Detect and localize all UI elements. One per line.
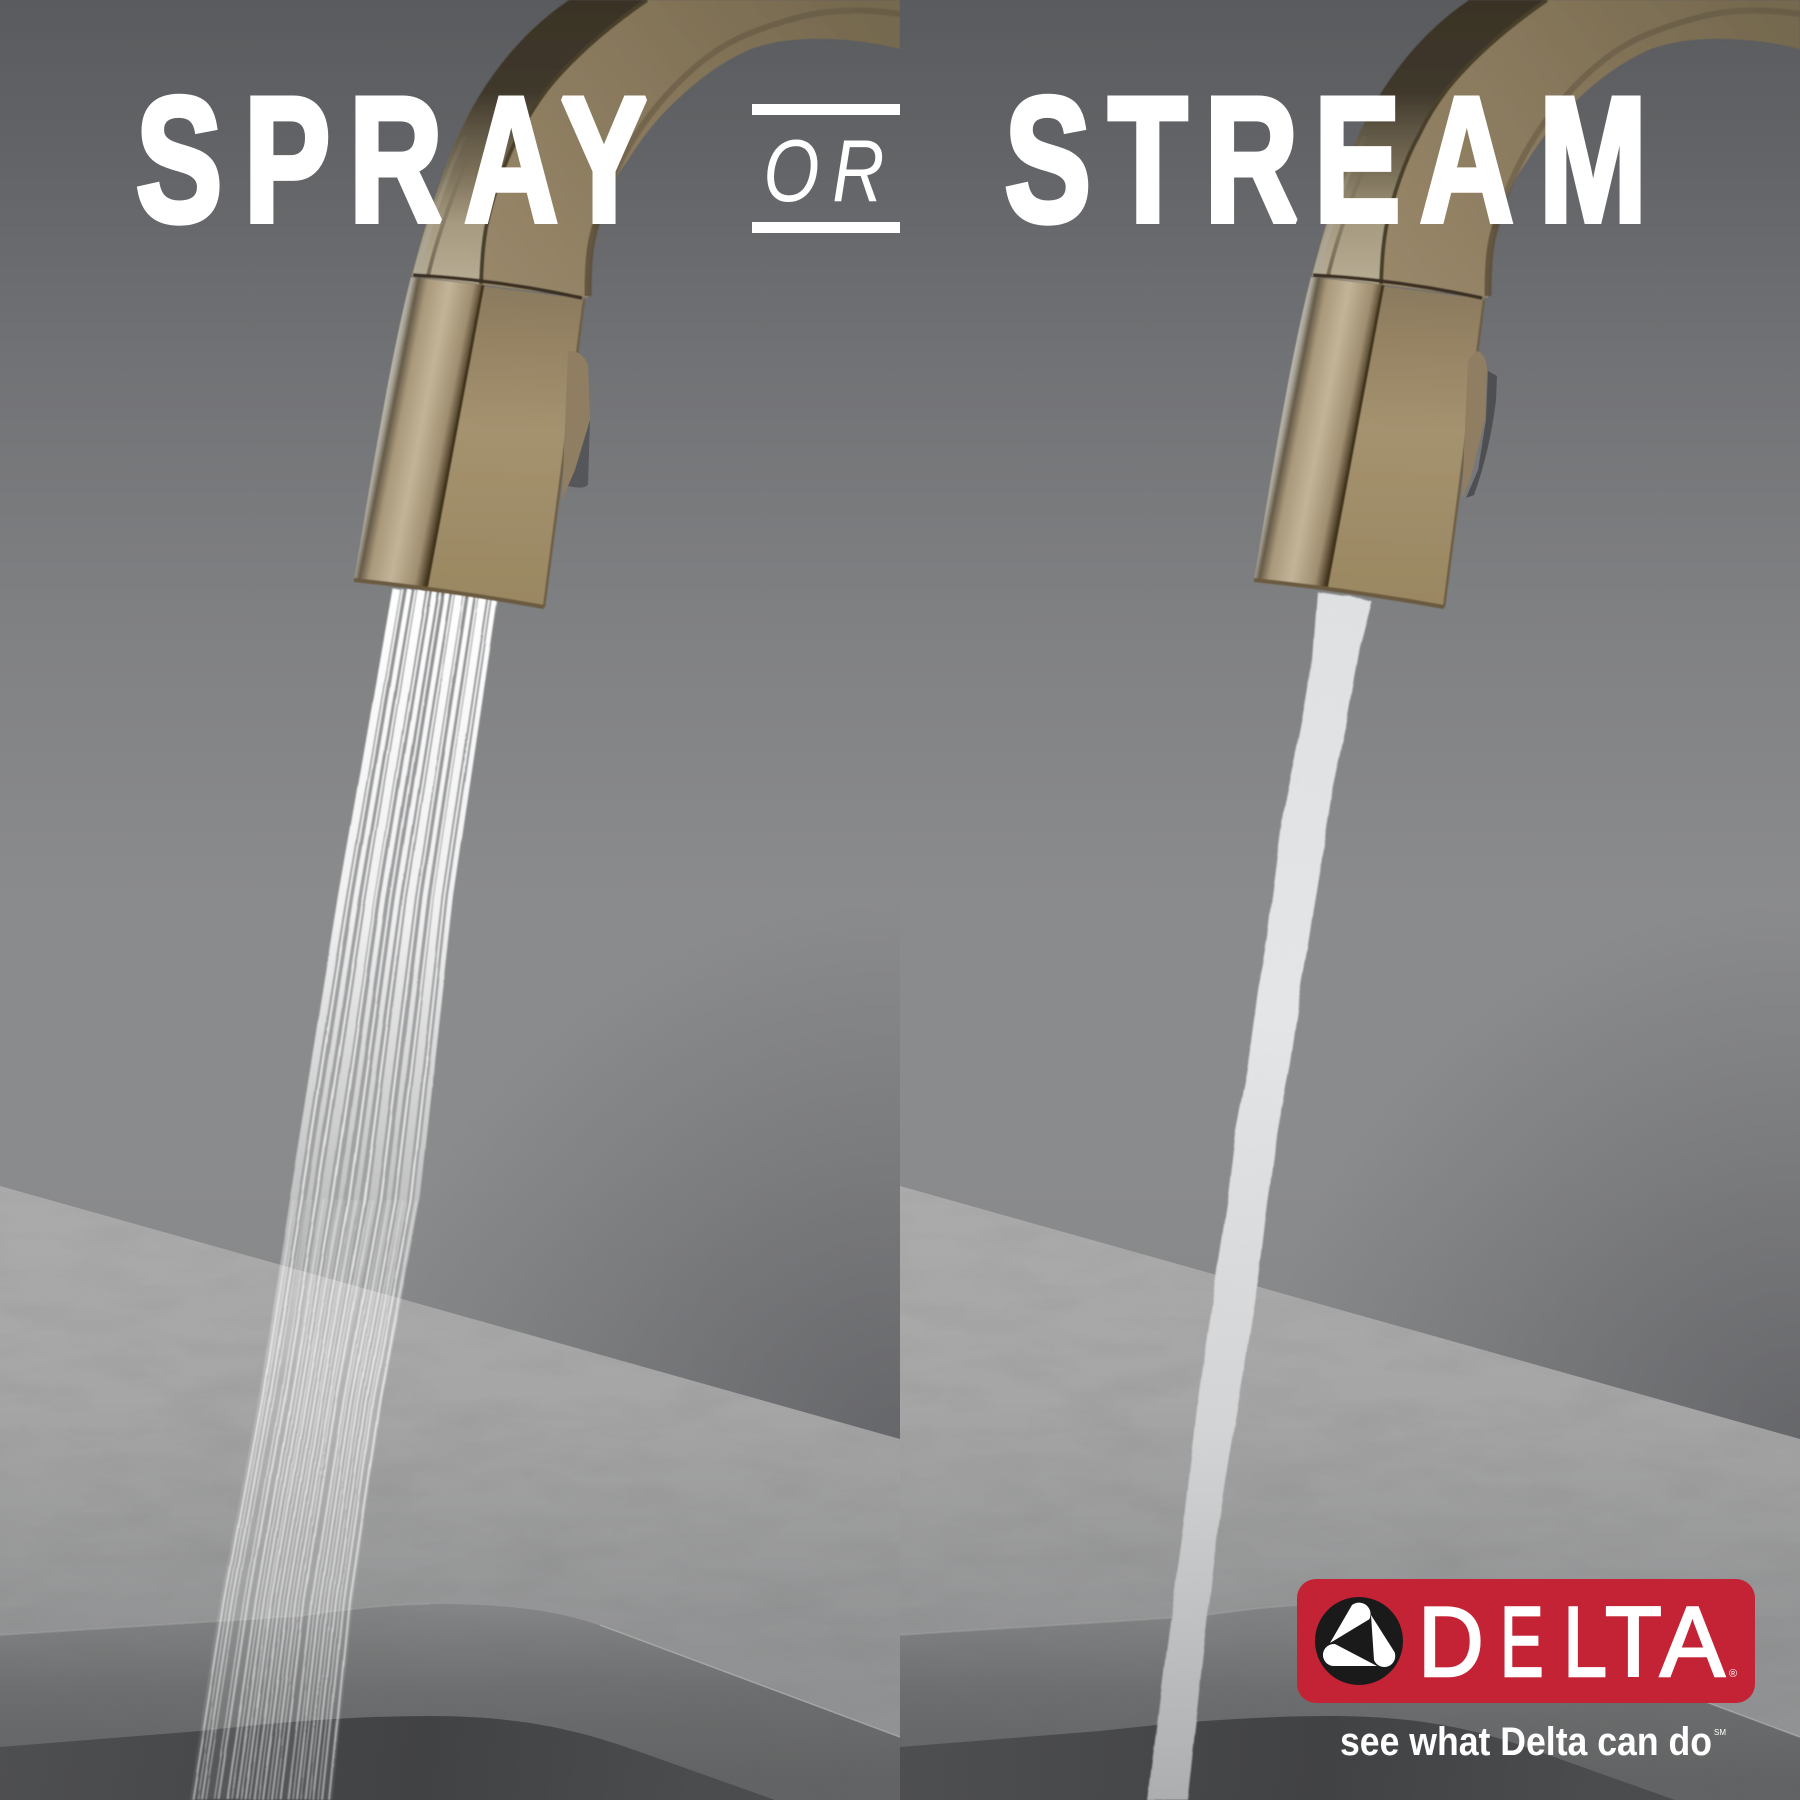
registered mark: ® bbox=[1729, 1668, 1737, 1680]
wordmark: D bbox=[1418, 1588, 1484, 1698]
divider: OR bbox=[752, 104, 900, 233]
tagline: see what Delta can do bbox=[1340, 1720, 1712, 1764]
wall and countertop background bbox=[0, 0, 900, 1800]
wall and countertop background bbox=[900, 0, 1800, 1800]
logo: Delta badge bbox=[1297, 1579, 1755, 1703]
heading: SPRAY: SPRAY bbox=[136, 61, 647, 260]
panel: spray (left half) bbox=[0, 0, 900, 1800]
icon: faucet toggle button bbox=[562, 351, 590, 500]
heading: STREAM: STREAM bbox=[1004, 61, 1647, 260]
icon: faucet toggle button bbox=[1462, 351, 1497, 498]
icon: faucet head bbox=[354, 0, 900, 607]
wordmark: E bbox=[1500, 1586, 1544, 1697]
divider: OR: OR bbox=[763, 122, 884, 221]
wordmark: T bbox=[1605, 1587, 1662, 1698]
tagline: SM bbox=[1714, 1728, 1726, 1737]
wordmark: A bbox=[1660, 1586, 1725, 1697]
wordmark: L bbox=[1563, 1587, 1607, 1697]
icon: stream water bbox=[1148, 592, 1372, 1800]
icon: spray water bbox=[189, 590, 498, 1800]
icon: Delta triangle mark bbox=[1315, 1597, 1403, 1685]
panel: stream (right half) bbox=[900, 0, 1800, 1800]
icon: faucet head bbox=[1254, 0, 1800, 607]
wordmark bbox=[1418, 1586, 1725, 1698]
